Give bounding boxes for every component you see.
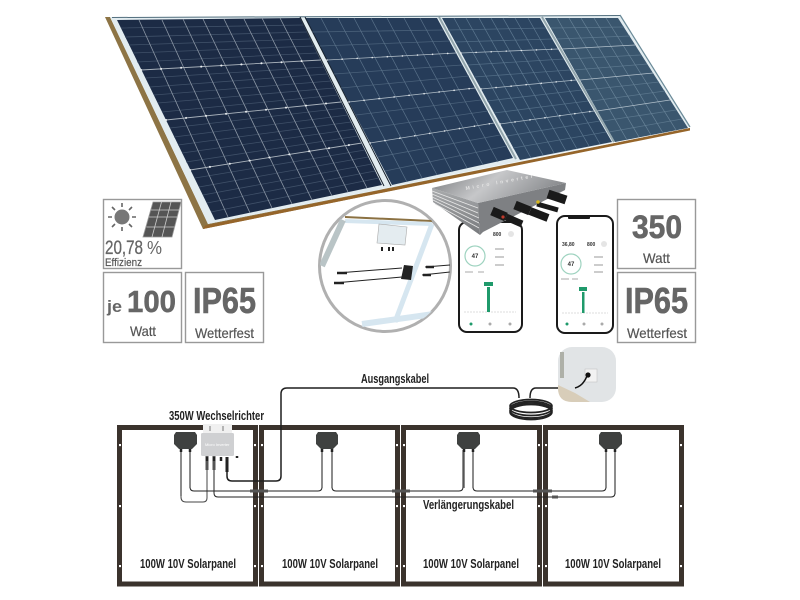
junction box 4 xyxy=(599,432,622,452)
panel frame 3: 100W 10V Solarpanel xyxy=(423,556,519,571)
small inverter xyxy=(201,424,237,472)
smartphone app left: 47 xyxy=(472,254,479,260)
wiring diagram xyxy=(120,347,682,584)
junction box 2 xyxy=(316,432,338,452)
badge: 350 Watt xyxy=(618,200,696,268)
junction box 1 xyxy=(174,432,197,452)
badge: IP65 Wetterfest right xyxy=(618,272,696,342)
badge: efficiency xyxy=(104,200,182,269)
cable to socket xyxy=(530,375,588,398)
small inverter: Micro Inverter xyxy=(205,442,230,447)
panel frame 4 xyxy=(546,428,682,584)
icon: sun xyxy=(108,203,136,231)
smartphone app right: 800 xyxy=(587,242,596,248)
panel frame 3 xyxy=(404,428,540,584)
badge: IP65 Wetterfest left: Wetterfest xyxy=(195,325,254,341)
badge: je 100 Watt: Watt xyxy=(130,323,156,339)
socket thumbnail xyxy=(558,347,616,402)
label: Verlängerungskabel: Verlängerungskabel xyxy=(423,497,514,512)
solar panel array photo xyxy=(105,15,690,229)
extension cables xyxy=(181,450,615,502)
badge: IP65 Wetterfest left xyxy=(186,272,264,342)
smartphone app left: 800 xyxy=(493,232,502,238)
smartphone app right xyxy=(557,216,613,333)
smartphone app right: 36,80 xyxy=(562,242,575,248)
badge: efficiency: % xyxy=(147,238,162,258)
cable coil xyxy=(510,400,552,420)
icon: solar module xyxy=(143,202,181,237)
junction box 3 xyxy=(457,432,480,452)
badge: IP65 Wetterfest right: IP65 xyxy=(625,280,688,321)
label: 350W Wechselrichter: 350W Wechselrichter xyxy=(169,408,264,423)
badge: je 100 Watt xyxy=(104,272,182,342)
badge: IP65 Wetterfest right: Wetterfest xyxy=(627,325,687,341)
badge: efficiency: Effizienz xyxy=(105,257,142,269)
badge: je 100 Watt: 100 xyxy=(127,284,176,319)
badge: 350 Watt: Watt xyxy=(643,250,670,266)
panel frame 1: 100W 10V Solarpanel xyxy=(140,556,236,571)
panel frame 1 xyxy=(120,428,256,584)
panel frame 2: 100W 10V Solarpanel xyxy=(282,556,378,571)
badge: IP65 Wetterfest left: IP65 xyxy=(193,280,256,321)
label: Ausgangskabel: Ausgangskabel xyxy=(361,371,429,386)
panel frame 4: 100W 10V Solarpanel xyxy=(565,556,661,571)
smartphone app left xyxy=(459,222,522,332)
panel frame 2 xyxy=(262,428,398,584)
output cable xyxy=(227,388,519,481)
badge: efficiency: 20,78 xyxy=(105,238,143,259)
badge: je 100 Watt: je xyxy=(106,297,122,316)
micro inverter product photo: Micro Inverter xyxy=(465,174,533,192)
magnifier detail circle xyxy=(320,200,450,332)
micro inverter product photo xyxy=(432,170,566,235)
badge: 350 Watt: 350 xyxy=(632,209,682,245)
smartphone app right: 47 xyxy=(568,262,575,268)
